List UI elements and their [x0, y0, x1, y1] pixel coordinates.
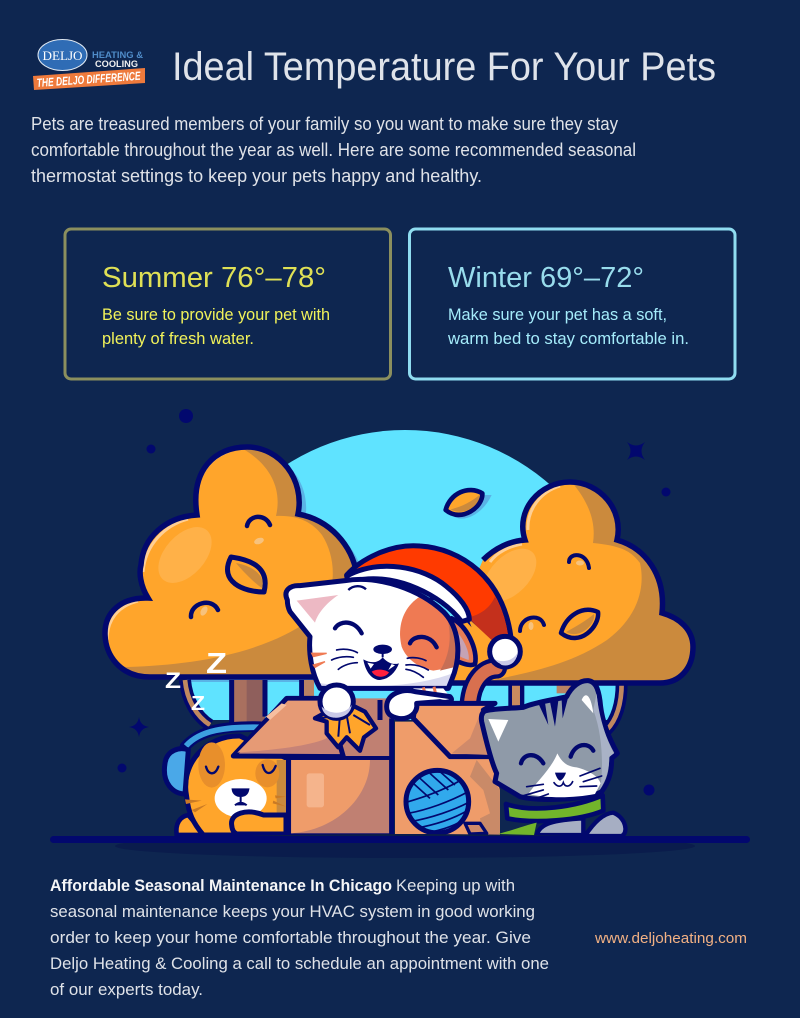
cat head — [286, 575, 462, 690]
gray cat eyes — [521, 745, 593, 763]
decorative dots and stars — [118, 409, 670, 796]
summer tip: plenty of fresh water. — [102, 330, 254, 348]
winter tip — [447, 306, 689, 348]
winter tip: Make sure your pet has a soft, — [448, 306, 667, 324]
logo: Deljo Heating & Cooling: COOLING — [95, 59, 138, 70]
dog whiskers — [185, 795, 286, 812]
cat mouth — [363, 657, 399, 680]
intro paragraph: thermostat settings to keep your pets happy and healthy. — [31, 166, 482, 186]
left paw — [320, 685, 353, 718]
sleeping z letters — [165, 648, 227, 715]
summer heading: Summer 76°–78° — [102, 262, 326, 294]
sleeping z letters: Z — [191, 693, 205, 715]
footer paragraph — [50, 876, 549, 999]
logo: Deljo Heating & Cooling — [33, 40, 145, 90]
gray cat body — [537, 818, 583, 835]
sky circle — [187, 430, 616, 720]
logo: Deljo Heating & Cooling: DELJO — [42, 48, 82, 63]
gray cat with green scarf — [481, 681, 625, 836]
white cat with santa hat — [286, 546, 511, 703]
cat whiskers — [332, 649, 428, 677]
logo: Deljo Heating & Cooling: THE DELJO DIFFERENCE — [36, 69, 142, 90]
icon: falling leaf — [446, 490, 492, 519]
icon: leaf under paw — [315, 707, 376, 751]
sleeping dog with headphones — [164, 727, 287, 835]
gray cat nose and smile — [555, 773, 566, 781]
dog muzzle — [215, 779, 267, 818]
winter heading: Winter 69°–72° — [448, 262, 644, 294]
white cat paws and pompom — [320, 636, 520, 719]
gray cat head — [481, 681, 617, 799]
footer paragraph: order to keep your home comfortable throughout the year. Give — [50, 928, 531, 947]
footer paragraph: Keeping up with — [396, 876, 515, 895]
gray cat stripes — [538, 697, 568, 727]
cat right ear — [448, 618, 476, 665]
panel: summer — [65, 229, 390, 379]
tree trunks — [185, 680, 622, 730]
cat tail — [470, 668, 497, 703]
headphone band — [185, 727, 260, 747]
intro paragraph: comfortable throughout the year as well. Here are some recommended seasonal — [31, 140, 636, 160]
headphone ear cup — [164, 749, 188, 794]
title: Ideal Temperature For Your Pets — [172, 45, 716, 89]
sleeping z letters: Z — [206, 648, 227, 680]
box left panel and flap — [233, 698, 393, 835]
yarn ball — [406, 770, 487, 834]
santa hat — [347, 546, 511, 652]
right paw — [387, 691, 452, 719]
icon: leaf on left tree — [228, 557, 265, 592]
illustration: cats and dog in autumn trees — [50, 409, 750, 858]
summer tip — [102, 306, 330, 348]
icon: leaf on right tree — [561, 610, 598, 638]
box right panel and flap — [380, 700, 500, 837]
winter tip: warm bed to stay comfortable in. — [447, 330, 689, 348]
footer paragraph: Deljo Heating & Cooling a call to schedule an appointment with one — [50, 954, 549, 973]
right tree — [452, 479, 696, 686]
summer tip: Be sure to provide your pet with — [102, 306, 330, 324]
logo: Deljo Heating & Cooling: HEATING & — [92, 50, 144, 60]
footer paragraph: Affordable Seasonal Maintenance In Chicago — [50, 876, 392, 895]
website link: www.deljoheating.com — [594, 930, 747, 947]
cat body — [413, 688, 450, 700]
dog nose — [233, 789, 248, 805]
dog eyes — [206, 765, 276, 773]
green scarf — [506, 795, 603, 821]
cat nose — [373, 645, 392, 654]
ground line — [50, 834, 750, 858]
gray cat whiskers — [523, 768, 602, 798]
cat eyes — [335, 623, 437, 647]
footer paragraph: seasonal maintenance keeps your HVAC system in good working — [50, 902, 535, 921]
dog head — [186, 736, 287, 835]
left tree — [100, 440, 370, 680]
footer paragraph: of our experts today. — [50, 980, 203, 999]
dog eye patches — [198, 742, 225, 788]
dog paw — [232, 812, 286, 834]
hat pompom — [490, 636, 520, 667]
cardboard box — [233, 698, 500, 837]
intro paragraph: Pets are treasured members of your family so you want to make sure they stay — [31, 114, 618, 134]
intro paragraph — [31, 114, 636, 186]
panel: winter — [410, 229, 735, 379]
sleeping z letters: Z — [165, 668, 181, 693]
